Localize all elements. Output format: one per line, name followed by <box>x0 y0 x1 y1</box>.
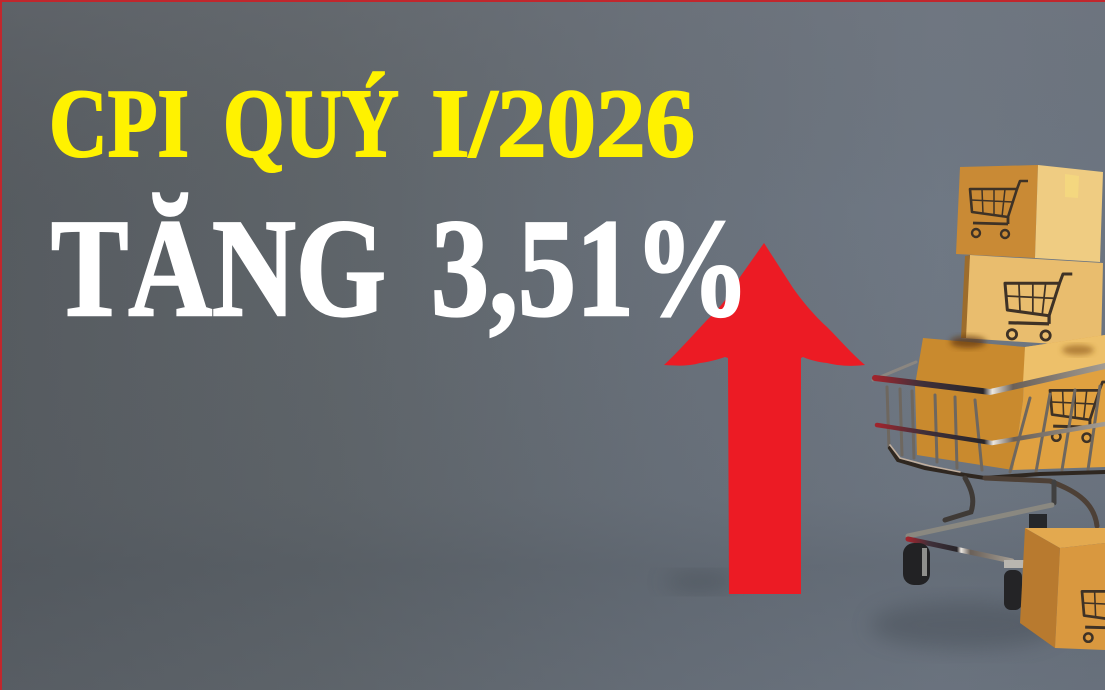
box: top carton <box>956 165 1103 262</box>
cart: wire basket <box>873 362 1105 478</box>
cart: wheels <box>903 514 1047 610</box>
icon: red upward arrow <box>664 243 865 594</box>
box: carton in the basket <box>915 335 1105 470</box>
box: carton on the floor <box>1020 528 1105 650</box>
title: CPI quarter line: CPI <box>49 70 189 178</box>
cart: chassis and legs <box>908 478 1097 561</box>
headline: increase figure: TĂNG <box>51 191 386 346</box>
title: CPI quarter line: QUÝ <box>223 70 399 178</box>
title: CPI quarter line <box>49 70 695 178</box>
headline: increase figure <box>51 191 750 346</box>
title: CPI quarter line: I/2026 <box>431 70 695 178</box>
illustration: shopping cart with boxes <box>873 165 1105 650</box>
box: middle carton <box>961 255 1103 347</box>
headline: increase figure: 3,51% <box>431 191 750 346</box>
